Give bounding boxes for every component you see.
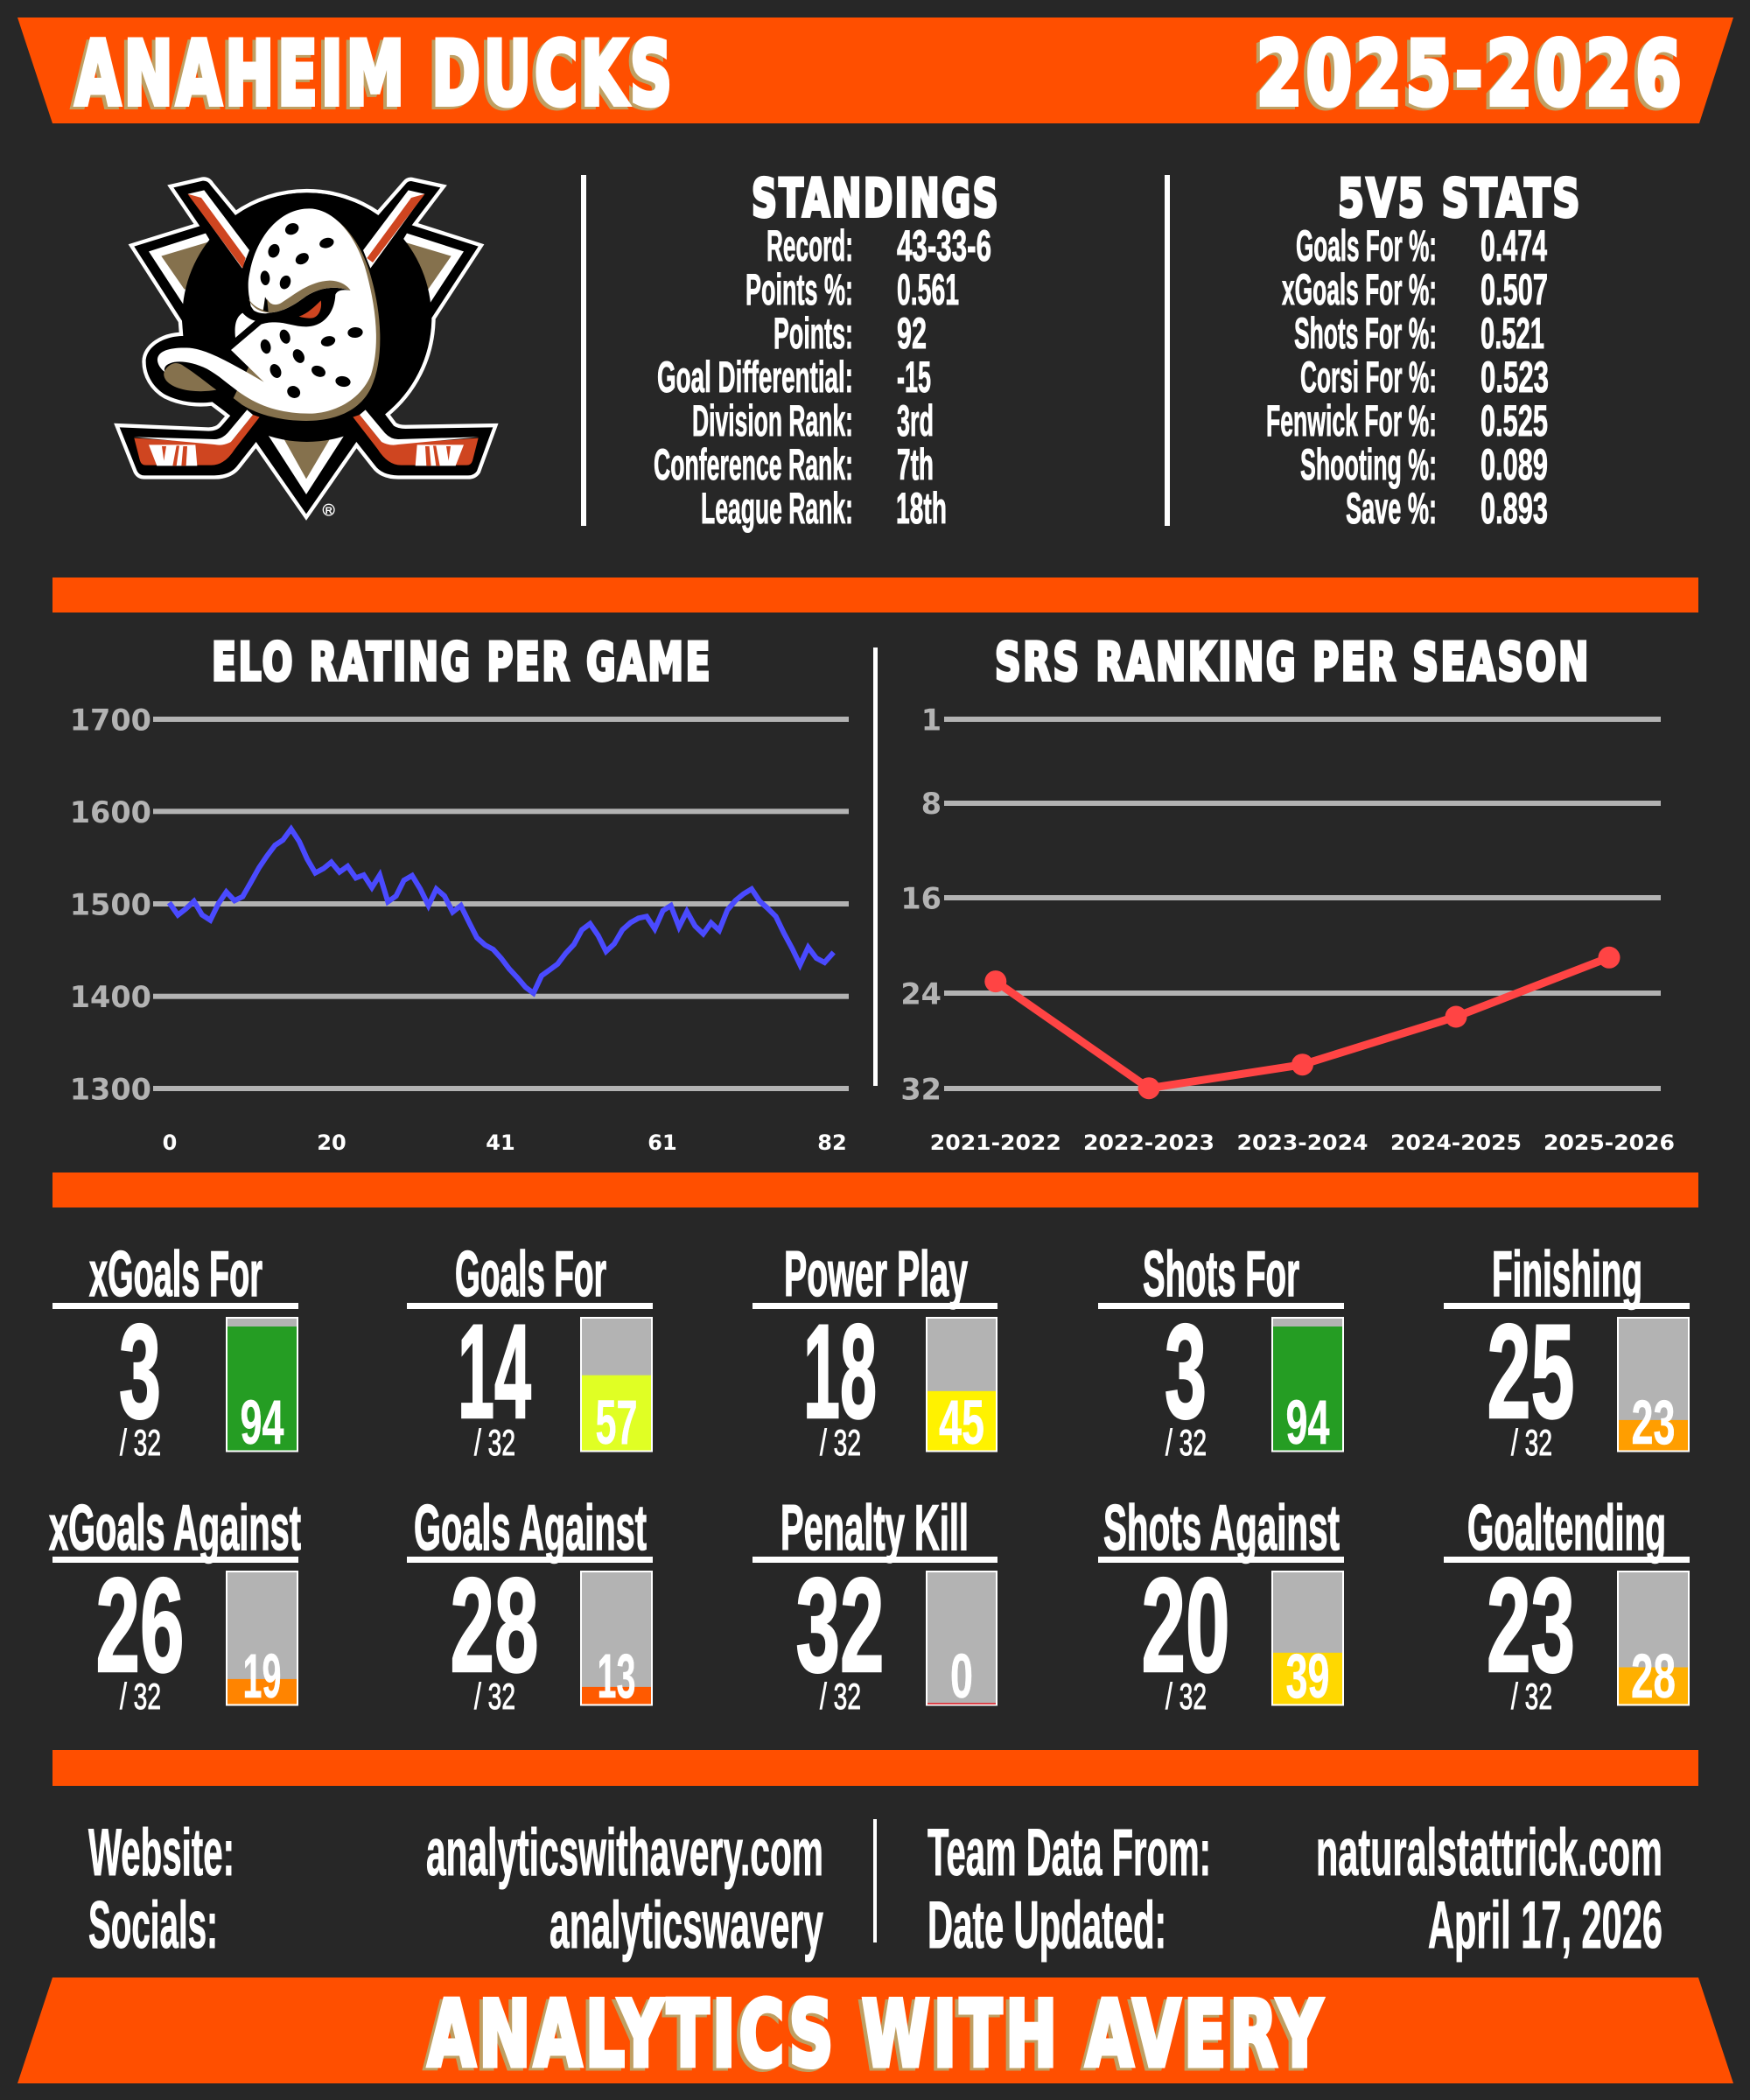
stat card: Shots Against: 20: [1141, 1550, 1230, 1700]
srs y axis labels: [900, 704, 942, 1106]
divider: standings and 5v5 stats: [1165, 175, 1170, 526]
stat card: xGoals Against: / 32: [120, 1676, 161, 1717]
standings labels: [654, 220, 853, 533]
credits: left: Website:: [88, 1816, 234, 1890]
srs x axis labels: 2025-2026: [1544, 1130, 1675, 1155]
standings values: 18th: [896, 483, 947, 533]
srs y axis labels: 8: [921, 787, 942, 821]
stat card: xGoals For: 94: [240, 1389, 284, 1458]
panel: srs chart: [900, 632, 1675, 1155]
5v5 values: 0.474: [1480, 220, 1547, 270]
elo y axis labels: 1700: [70, 704, 151, 737]
elo y axis labels: [70, 704, 151, 1106]
5v5 labels: Shots For %:: [1294, 308, 1437, 358]
srs x axis labels: [930, 1130, 1675, 1155]
elo x axis labels: 20: [317, 1130, 346, 1155]
elo line: [169, 829, 834, 993]
logo: Anaheim Ducks: [120, 181, 493, 516]
stat card: Power Play: 18: [803, 1297, 877, 1446]
panel: elo chart: [70, 632, 849, 1155]
standings labels: Division Rank:: [692, 396, 853, 445]
srs x axis labels: 2022-2023: [1083, 1130, 1214, 1155]
stat card: Power Play: 45: [939, 1389, 984, 1458]
credits: left: Socials:: [88, 1888, 218, 1963]
stat card: Shots For: [1098, 1239, 1344, 1463]
standings values: 0.561: [897, 264, 959, 314]
5v5 values: 0.521: [1480, 308, 1544, 358]
stat card: Goaltending: 28: [1631, 1642, 1676, 1712]
standings heading: STANDINGS: [752, 168, 1000, 229]
5v5 labels: Fenwick For %:: [1266, 396, 1437, 445]
srs y axis labels: 24: [900, 976, 942, 1012]
stat card: Finishing: 25: [1488, 1297, 1575, 1446]
srs x axis labels: 2023-2024: [1237, 1130, 1368, 1155]
stat card: xGoals For: / 32: [120, 1422, 161, 1463]
stat card: Finishing: [1444, 1239, 1690, 1463]
5v5 values: 0.525: [1480, 396, 1548, 445]
elo x axis labels: 82: [817, 1130, 847, 1155]
stat card: Goals For: Goals For: [455, 1239, 606, 1310]
srs y axis labels: 1: [921, 704, 942, 737]
section band: [52, 1750, 1698, 1786]
credits: left: [88, 1816, 823, 1963]
section band: [52, 578, 1698, 612]
standings values: 92: [897, 308, 927, 358]
stat card: Shots For: / 32: [1166, 1422, 1207, 1463]
registered mark: [323, 504, 334, 516]
standings labels: League Rank:: [701, 483, 853, 533]
registered mark: R: [326, 506, 332, 516]
stat card: Power Play: / 32: [820, 1422, 861, 1463]
elo chart title: ELO RATING PER GAME: [212, 632, 712, 693]
standings values: 43-33-6: [897, 220, 991, 270]
standings labels: Goal Differential:: [657, 352, 853, 402]
panel: 5v5 stats: [1266, 168, 1582, 533]
right stick blade: [353, 410, 479, 466]
standings values: 3rd: [897, 396, 934, 445]
footer title: [424, 1983, 1326, 2090]
srs x axis labels: 2024-2025: [1390, 1130, 1522, 1155]
5v5 labels: [1266, 220, 1437, 533]
credits: left: analyticswithavery.com: [426, 1816, 823, 1890]
section band: [52, 1172, 1698, 1208]
stat card: Goals Against: 28: [450, 1550, 539, 1700]
footer banner: [18, 1978, 1733, 2090]
stat card: xGoals Against: xGoals Against: [49, 1493, 301, 1564]
stat card: Goals Against: / 32: [474, 1676, 515, 1717]
standings values: 7th: [897, 439, 934, 489]
stat card: Shots Against: [1098, 1493, 1344, 1717]
left stick blade: [134, 410, 260, 466]
stat card: Shots For: Shots For: [1143, 1239, 1299, 1310]
stat card: Goals For: [407, 1239, 653, 1463]
stat card: Power Play: Power Play: [784, 1239, 968, 1310]
credits: right: Date Updated:: [928, 1888, 1166, 1963]
stat card: Shots Against: Shots Against: [1103, 1493, 1340, 1564]
stat card: Finishing: / 32: [1511, 1422, 1552, 1463]
credits: left: analyticswavery: [550, 1888, 823, 1963]
divider: charts: [873, 648, 878, 1086]
stat card: Goaltending: 23: [1487, 1550, 1575, 1700]
standings labels: Points:: [774, 308, 853, 358]
standings values: -15: [897, 352, 931, 402]
5v5 stats heading: 5V5 STATS: [1338, 168, 1582, 229]
5v5 labels: Save %:: [1346, 483, 1437, 533]
stat card: Power Play: [752, 1239, 998, 1463]
srs line: [984, 947, 1620, 1099]
srs gridlines: [944, 717, 1661, 1091]
stat card: Goals For: 57: [595, 1389, 637, 1458]
elo y axis labels: 1500: [70, 887, 151, 922]
elo y axis labels: 1400: [70, 980, 151, 1014]
standings labels: Points %:: [746, 264, 853, 314]
stat card: Finishing: 23: [1631, 1389, 1675, 1458]
elo y axis labels: 1300: [70, 1073, 151, 1106]
elo gridlines: [153, 717, 849, 1091]
srs y axis labels: 16: [900, 882, 942, 915]
stat card: Goaltending: / 32: [1511, 1676, 1552, 1717]
5v5 values: 0.507: [1480, 264, 1548, 314]
stat card: Goals Against: [407, 1493, 653, 1717]
5v5 labels: Goals For %:: [1296, 220, 1437, 270]
stat card: Penalty Kill: / 32: [820, 1676, 861, 1717]
standings values: [896, 220, 991, 533]
stat card: Penalty Kill: 0: [950, 1642, 973, 1712]
elo x axis labels: 0: [163, 1130, 177, 1155]
elo y axis labels: 1600: [70, 795, 151, 830]
team name: ANAHEIM DUCKS: [72, 24, 672, 128]
panel: standings: [654, 168, 1000, 533]
5v5 values: [1480, 220, 1549, 533]
stat card: Penalty Kill: Penalty Kill: [780, 1493, 969, 1564]
stat card: Shots For: 3: [1165, 1297, 1207, 1446]
stat card: Shots For: 94: [1286, 1389, 1330, 1458]
stat card: Goals For: 14: [458, 1297, 531, 1446]
stat card: Goaltending: [1444, 1493, 1690, 1717]
stat card: xGoals For: 3: [119, 1297, 161, 1446]
footer title: ANALYTICS WITH AVERY: [424, 1984, 1322, 2090]
stat card: Penalty Kill: [752, 1493, 998, 1717]
stat card: xGoals Against: 26: [96, 1550, 184, 1700]
srs y axis labels: 32: [900, 1073, 942, 1106]
team name: ANAHEIM DUCKS: [75, 22, 676, 125]
standings labels: Record:: [766, 220, 853, 270]
stat card: Goals Against: Goals Against: [414, 1493, 647, 1564]
elo x axis labels: 61: [648, 1130, 677, 1155]
5v5 values: 0.893: [1480, 483, 1548, 533]
stat card: xGoals Against: [49, 1493, 301, 1717]
standings labels: Conference Rank:: [654, 439, 853, 489]
duck face: [158, 208, 380, 421]
elo x axis labels: 41: [486, 1130, 515, 1155]
upper sticks: [187, 190, 425, 269]
5v5 labels: xGoals For %:: [1282, 264, 1437, 314]
stat card: xGoals Against: 19: [243, 1642, 282, 1712]
elo x axis labels: [163, 1130, 847, 1155]
stat card: Penalty Kill: 32: [796, 1550, 884, 1700]
footer title: ANALYTICS WITH AVERY: [428, 1983, 1326, 2088]
credits: right: [928, 1816, 1662, 1963]
5v5 values: 0.089: [1480, 439, 1548, 489]
team name: [72, 22, 676, 128]
divider: logo and standings: [581, 175, 586, 526]
5v5 labels: Corsi For %:: [1300, 352, 1437, 402]
stat card: Goals For: / 32: [474, 1422, 515, 1463]
stat card: Shots Against: / 32: [1166, 1676, 1207, 1717]
divider: credits: [873, 1819, 877, 1942]
stat card: Goals Against: 13: [597, 1642, 635, 1712]
stat card: xGoals For: [52, 1239, 298, 1463]
credits: right: Team Data From:: [928, 1816, 1211, 1890]
5v5 values: 0.523: [1480, 352, 1549, 402]
srs x axis labels: 2021-2022: [930, 1130, 1061, 1155]
5v5 labels: Shooting %:: [1300, 439, 1437, 489]
stat card: Shots Against: 39: [1286, 1642, 1330, 1712]
stat card: xGoals For: xGoals For: [89, 1239, 262, 1310]
header banner: [18, 18, 1733, 128]
